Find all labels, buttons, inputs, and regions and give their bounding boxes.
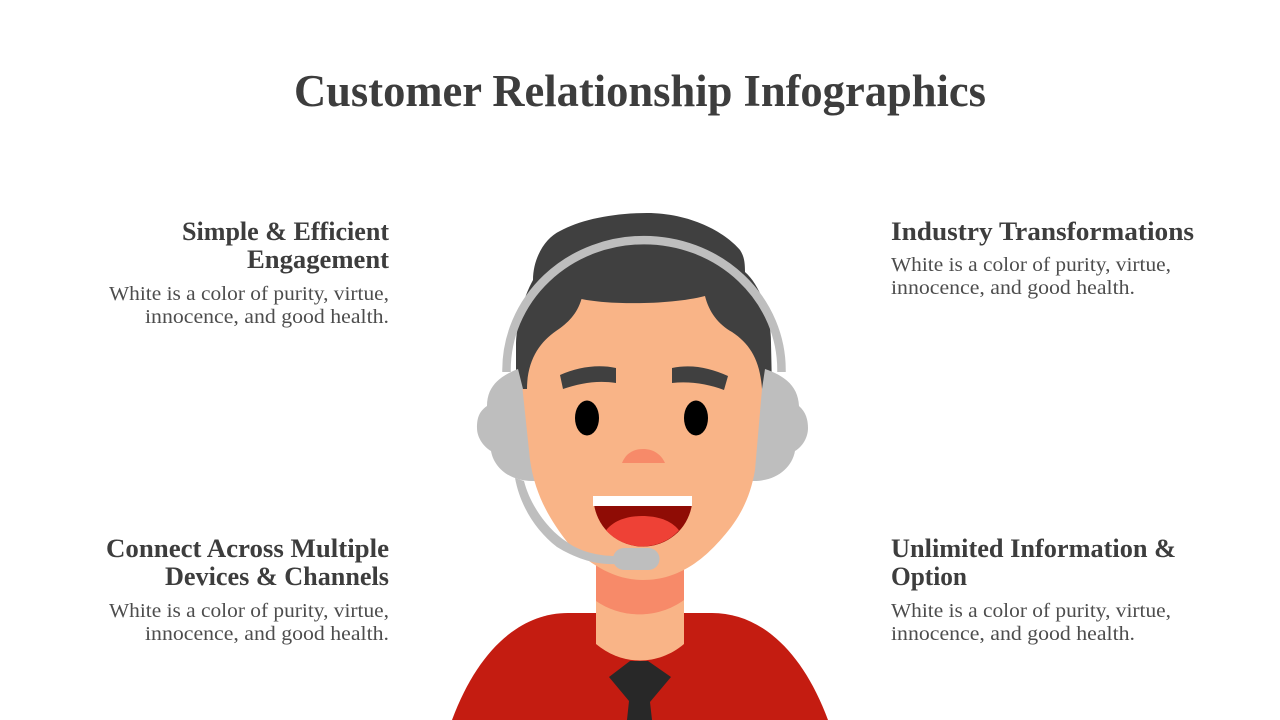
ear cup left [477,369,560,481]
text block: Connect Across Multiple Devices & Channels: White is a color of purity, virtue, [109,600,389,622]
headset band [506,240,782,372]
text block: Simple & Efficient Engagement: White is a color of purity, virtue, [109,283,389,305]
neck shadow [596,555,684,614]
title: Customer Relationship Infographics [294,66,986,116]
eyebrow right [672,366,728,390]
headset boom arm [515,478,615,564]
text block: Connect Across Multiple Devices & Channels: Devices & Channels [165,562,389,591]
text block: Simple & Efficient Engagement: Simple & Efficient [182,217,389,246]
eye left [575,400,599,436]
mouth [594,506,692,547]
eye right [684,400,708,436]
text block: Unlimited Information & Option: Unlimited Information & [891,534,1176,563]
text block: Unlimited Information & Option: innocence, and good health. [891,623,1135,645]
text block: Simple & Efficient Engagement: Engagement [247,245,389,274]
illustration: customer support agent [452,213,828,720]
text block: Connect Across Multiple Devices & Channels: innocence, and good health. [145,623,389,645]
teeth [593,496,692,506]
hair [516,213,772,389]
neck [596,555,684,660]
face [522,296,762,580]
microphone [613,548,660,570]
text block: Simple & Efficient Engagement [109,217,389,328]
tie [609,661,671,720]
text block: Industry Transformations: Industry Transformations [891,217,1194,246]
nose [622,449,665,463]
tongue [606,516,679,546]
text block: Industry Transformations [891,217,1194,299]
text block: Industry Transformations: White is a color of purity, virtue, [891,254,1171,276]
text block: Industry Transformations: innocence, and good health. [891,277,1135,299]
ear cup right [730,369,808,481]
text block: Unlimited Information & Option [891,534,1176,645]
text block: Unlimited Information & Option: White is a color of purity, virtue, [891,600,1171,622]
shirt [452,613,828,720]
eyebrow left [560,366,616,389]
text block: Connect Across Multiple Devices & Channels: Connect Across Multiple [106,534,389,563]
text block: Unlimited Information & Option: Option [891,562,968,591]
text block: Connect Across Multiple Devices & Channels [106,534,389,645]
text block: Simple & Efficient Engagement: innocence, and good health. [145,306,389,328]
